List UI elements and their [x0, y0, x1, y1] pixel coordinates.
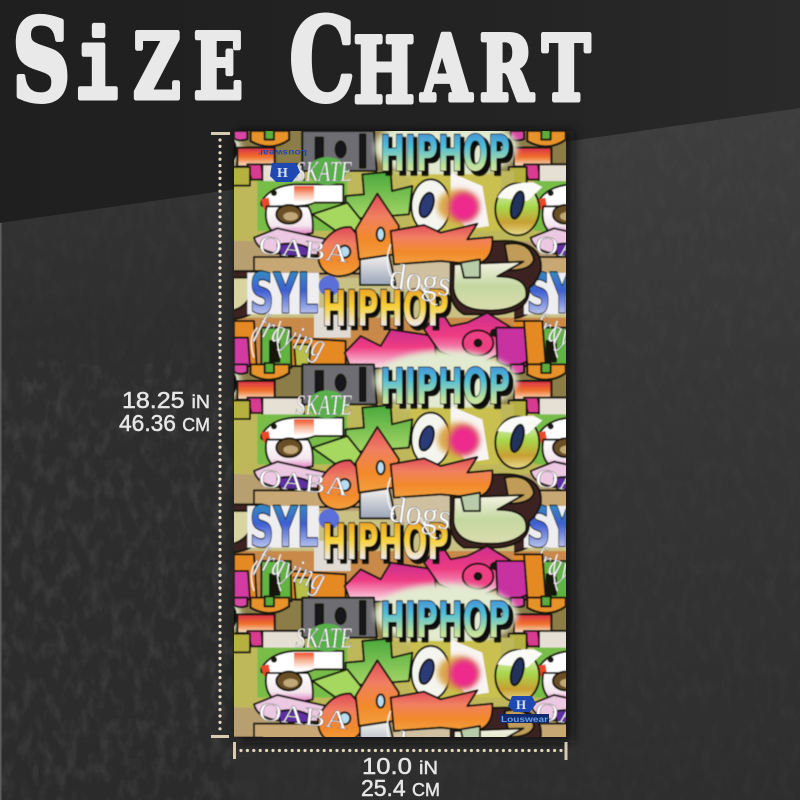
brand logo bottom: Louswear: [501, 715, 548, 724]
graffiti pattern tiles: [234, 131, 566, 737]
brand logo top: H: [277, 166, 288, 181]
brand logo top: [259, 148, 307, 182]
brand logo bottom: H: [516, 697, 526, 712]
width label: 10.0 iN: [362, 753, 438, 779]
title: H: [354, 18, 415, 124]
title: A: [420, 16, 472, 122]
width label: [361, 753, 440, 800]
brand logo top: Louswear: [259, 148, 307, 157]
height label: 18.25 iN: [122, 387, 210, 413]
title: E: [194, 14, 243, 120]
title: i: [76, 15, 119, 129]
height label: 46.36 CM: [119, 410, 210, 436]
top dark diagonal band: [0, 0, 800, 223]
brand logo bottom: [500, 696, 549, 724]
panel shadow: [236, 131, 574, 743]
title: T: [542, 16, 590, 122]
height measurement line: [211, 132, 230, 738]
height label: [119, 387, 210, 436]
graffiti neck gaiter panel: [234, 131, 566, 737]
width measurement line: [233, 742, 568, 760]
title: Z: [133, 14, 181, 120]
title: R: [480, 16, 534, 122]
